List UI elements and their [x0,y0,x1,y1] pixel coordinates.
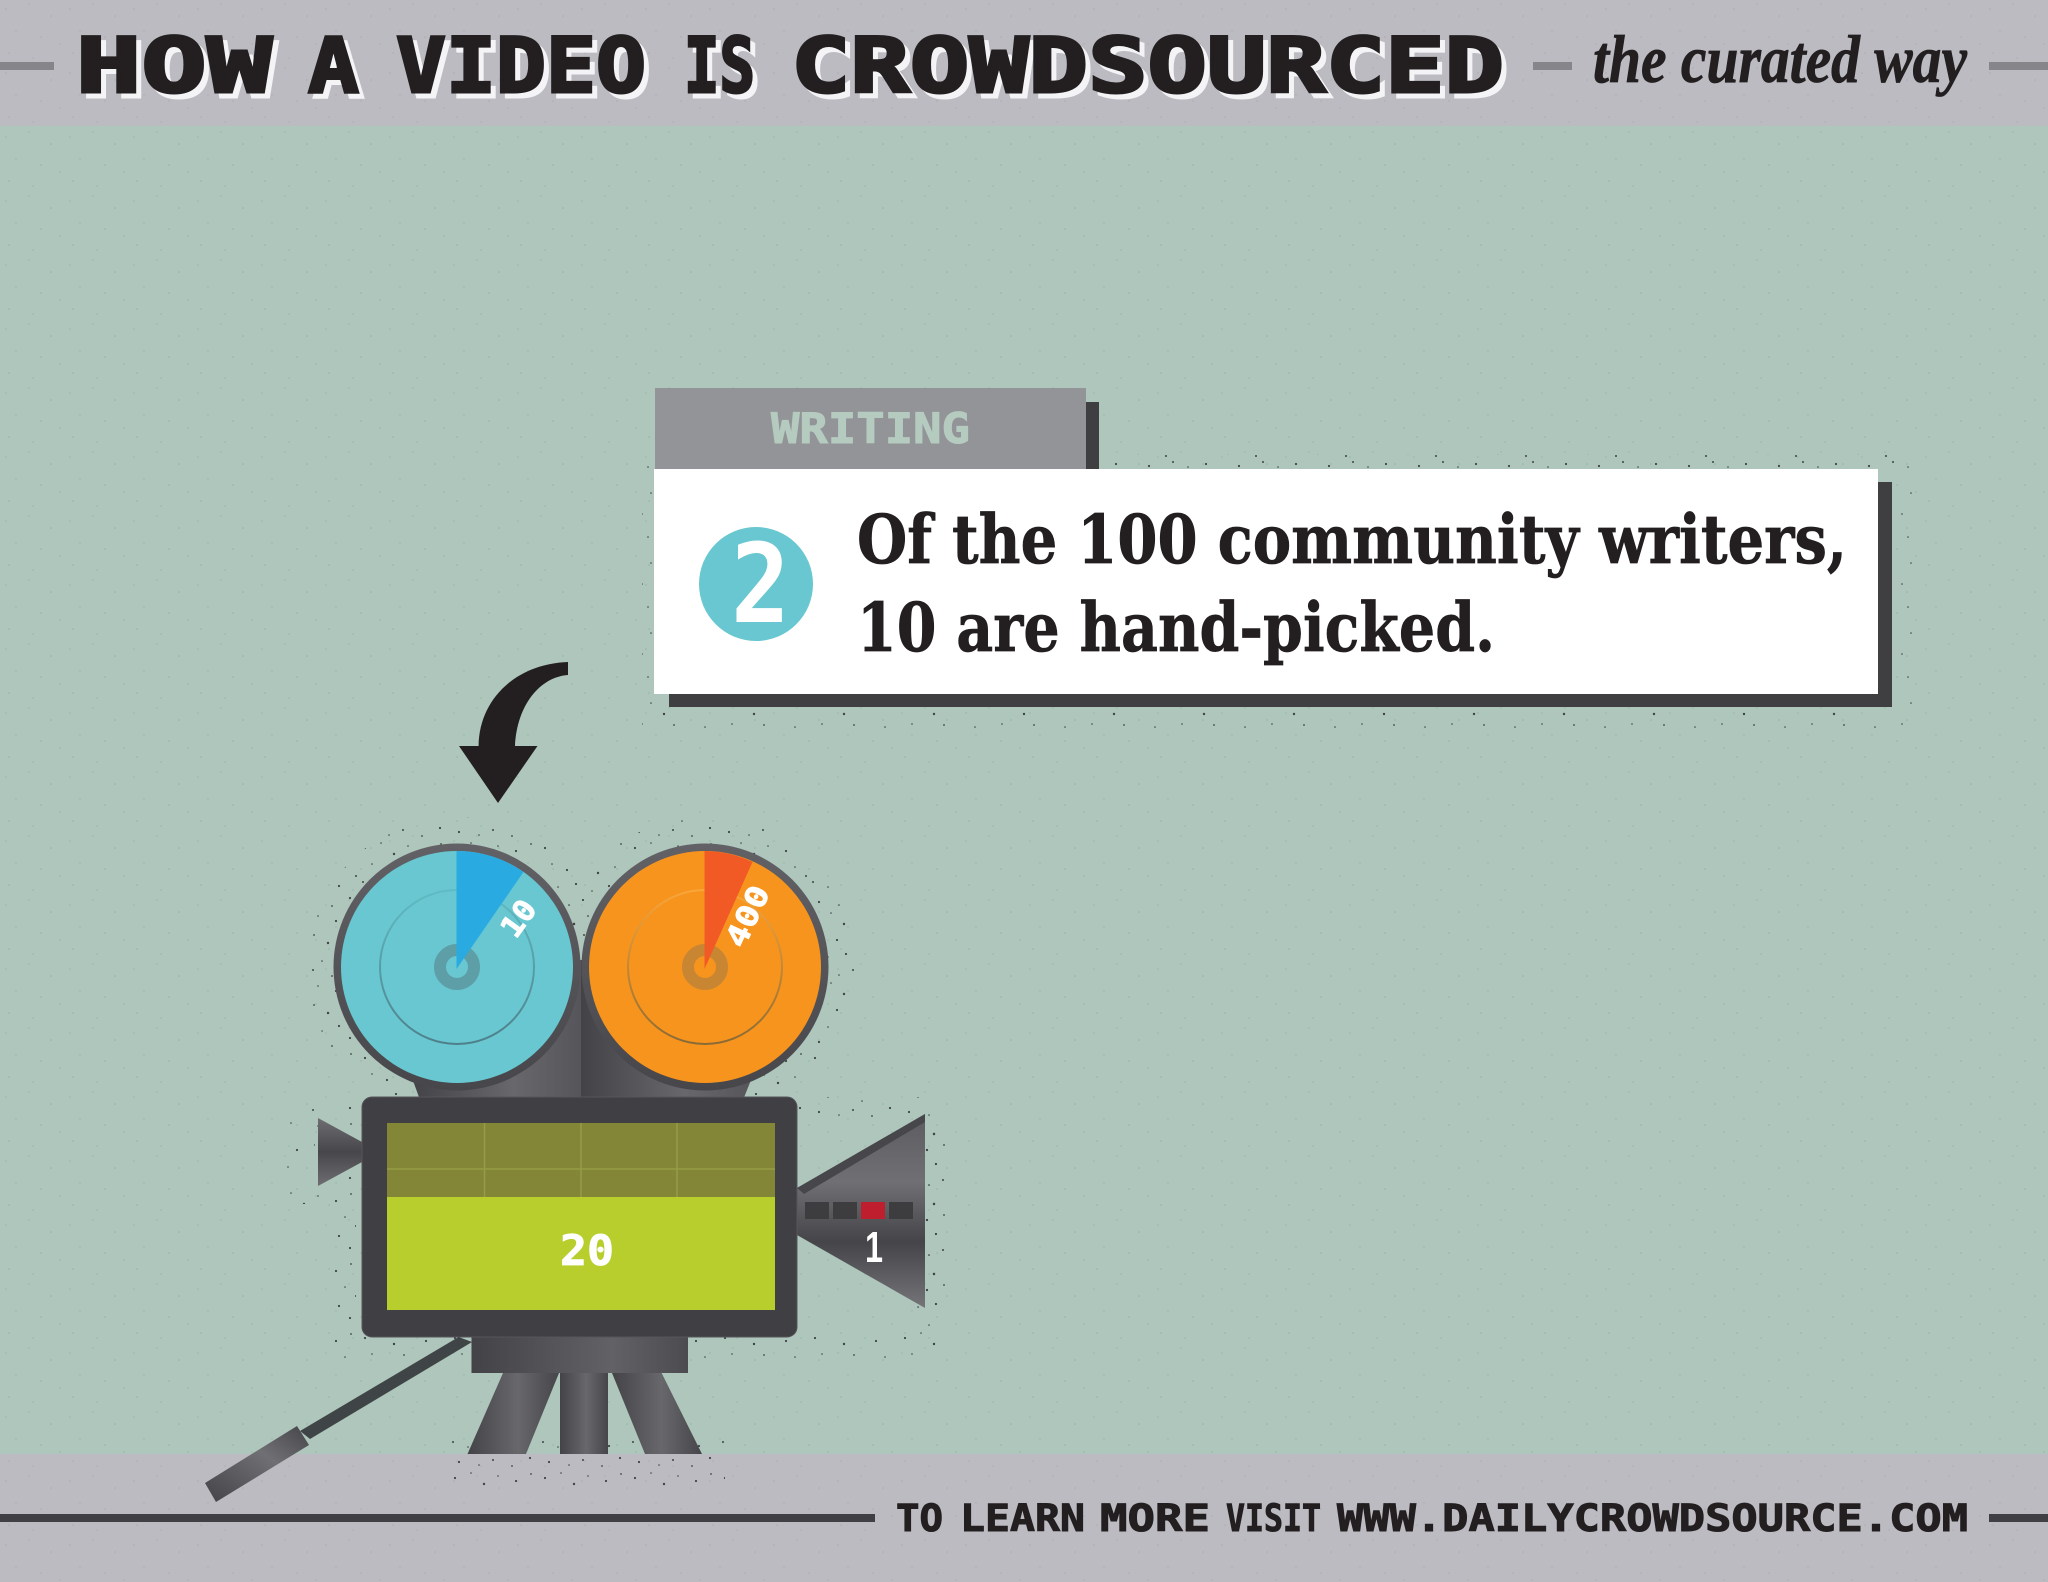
header band [0,0,2048,126]
writing tab [655,388,1099,472]
indicator lights [805,1202,913,1219]
title: IS [689,26,760,115]
screen [387,1123,775,1310]
reel value: 400: 400 [719,880,778,953]
footer text: WWW.DAILYCROWDSOURCE.COM [1337,1497,1968,1540]
title: A [313,26,364,115]
reel: views [582,844,828,1090]
card [654,469,1878,694]
camera body [362,1097,797,1337]
footer text: TO [896,1497,943,1540]
writing tab: WRITING [771,404,970,453]
camera [205,831,939,1502]
footer band [0,1454,2048,1582]
callout text: 10 are hand-picked. [857,588,1495,667]
title: VIDEO [401,26,651,115]
cable and remote handle [205,1337,472,1502]
title: HOW [76,21,272,110]
footer text [896,1497,1968,1540]
title: HOW [81,26,277,115]
subtitle: the curated way [1593,21,1968,97]
arrow [459,662,568,803]
title: CROWDSOURCED [791,21,1504,110]
speckle around camera [292,831,939,1478]
title: IS [684,21,755,110]
screen value: 20: 20 [560,1226,614,1275]
title: CROWDSOURCED [796,26,1509,115]
back viewfinder [318,1118,362,1186]
reel value: 10: 10 [494,893,545,945]
camera neck [411,960,753,1100]
card shadow [669,482,1892,707]
footer text: VISIT [1226,1497,1321,1540]
lens value: 1: 1 [865,1223,883,1272]
title [76,21,1509,115]
footer text: MORE [1100,1497,1210,1540]
title: VIDEO [396,21,646,110]
step number [699,520,813,648]
tripod legs [468,1373,702,1454]
step number: 2 [731,520,790,648]
callout text: Of the 100 community writers, [857,500,1847,579]
callout: writing step [650,388,1908,720]
lens [797,1114,925,1308]
title: A [308,21,359,110]
tripod head [472,1335,688,1373]
callout text [857,500,1847,667]
footer text: LEARN [960,1497,1085,1540]
reel: writers pool [334,844,580,1090]
